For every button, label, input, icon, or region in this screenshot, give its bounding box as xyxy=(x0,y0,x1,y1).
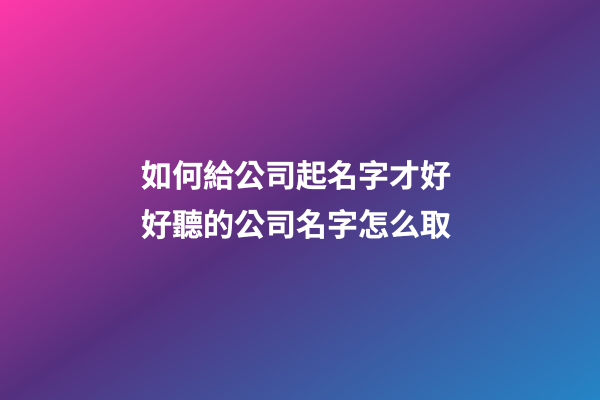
title: 如何給公司起名字才好 xyxy=(141,159,451,194)
title: 好聽的公司名字怎么取 xyxy=(141,208,451,243)
title xyxy=(141,159,451,243)
